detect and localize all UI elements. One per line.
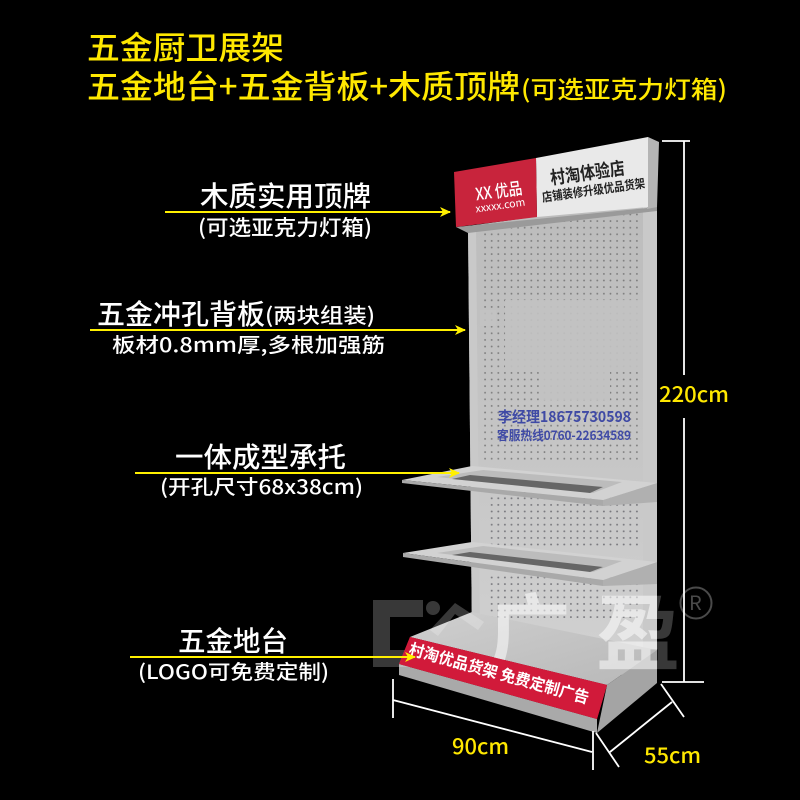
dimension: depth 55cm: 55cm bbox=[644, 740, 701, 770]
watermark logo: 盈 bbox=[596, 568, 680, 689]
label: perforated back panel: 板材0.8mm厚,多根加强筋 bbox=[112, 329, 385, 358]
contact phone text: 客服热线0760-22634589 bbox=[497, 425, 631, 444]
watermark highlight over rack: 广 bbox=[487, 568, 571, 689]
watermark logo bbox=[373, 568, 680, 689]
title: (可选亚克力灯箱) bbox=[521, 70, 727, 105]
title: 五金地台+五金背板+木质顶牌 bbox=[87, 62, 520, 108]
dimension: depth 55cm bbox=[596, 684, 701, 770]
back panel bbox=[468, 200, 657, 683]
title bbox=[87, 23, 727, 108]
contact phone text: 李经理18675730598 bbox=[498, 406, 631, 427]
shelf 1 bbox=[402, 466, 657, 506]
label: shelf bracket: 一体成型承托 bbox=[175, 436, 346, 476]
base platform bbox=[399, 612, 657, 733]
title: 五金厨卫展架 bbox=[87, 23, 284, 69]
infographic canvas bbox=[88, 32, 728, 770]
watermark highlight over rack bbox=[494, 592, 657, 670]
shelf 2 bbox=[403, 542, 657, 586]
registered mark: R bbox=[689, 587, 702, 616]
label: base: 五金地台 bbox=[178, 620, 288, 660]
contact phone text bbox=[497, 406, 631, 444]
base banner bbox=[399, 637, 607, 719]
top sign board: 村淘体验店 bbox=[548, 154, 626, 190]
label: perforated back panel: 五金冲孔背板 bbox=[97, 293, 265, 333]
top sign board: XX 优品 bbox=[474, 174, 524, 205]
registered mark bbox=[680, 587, 712, 618]
top sign board: 店铺装修升级优品货架 bbox=[540, 172, 647, 206]
watermark logo: 广 bbox=[487, 568, 571, 689]
label: top sign bbox=[165, 175, 450, 242]
label: shelf bracket: (开孔尺寸68x38cm) bbox=[160, 471, 363, 500]
label: base bbox=[130, 620, 415, 685]
dimension: height 220cm bbox=[659, 141, 729, 682]
label: perforated back panel: (两块组装) bbox=[265, 300, 375, 330]
dimension: height 220cm: 220cm bbox=[659, 379, 729, 409]
label: shelf bracket bbox=[135, 436, 459, 500]
label: top sign: 木质实用顶牌 bbox=[200, 175, 371, 215]
label: top sign: (可选亚克力灯箱) bbox=[198, 212, 372, 242]
label: base: (LOGO可免费定制) bbox=[138, 656, 329, 685]
dimension: width 90cm: 90cm bbox=[452, 731, 509, 761]
watermark highlight over rack: 盈 bbox=[596, 568, 680, 689]
display rack bbox=[399, 137, 659, 733]
label: perforated back panel bbox=[90, 293, 465, 358]
top sign board bbox=[454, 137, 659, 233]
dimension: width 90cm bbox=[393, 679, 593, 770]
top sign board: xxxxx.com bbox=[475, 195, 526, 216]
slogan text: 村淘优品货架 免费定制广告 bbox=[407, 636, 592, 709]
